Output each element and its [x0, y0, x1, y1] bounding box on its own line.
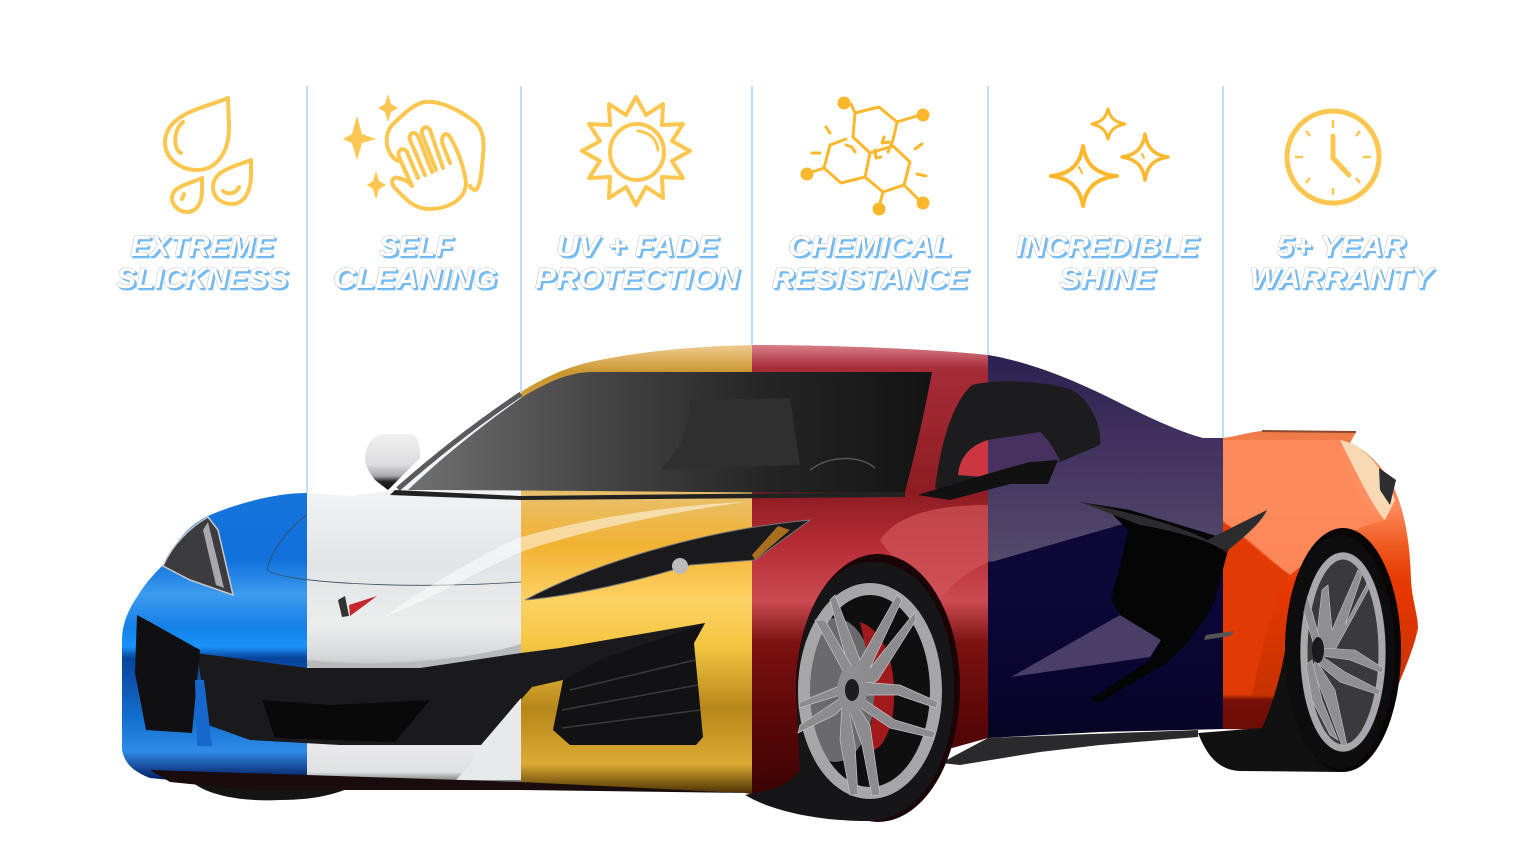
- orange rear highlight: [1340, 440, 1395, 520]
- label: self cleaning: SELF: [379, 231, 454, 263]
- front brake disc and caliper: [795, 618, 894, 762]
- rear rim ring: [1304, 556, 1382, 748]
- purple lower highlight: [1011, 615, 1161, 677]
- front tyre shadow under bumper: [185, 775, 365, 800]
- amber headlight accent: [752, 526, 790, 560]
- icon: molecule: [800, 96, 930, 216]
- orange lower panel: [1223, 522, 1290, 695]
- label: five year warranty: WARRANTY: [1250, 263, 1435, 295]
- colored body bands: [100, 340, 1433, 820]
- panel: five year warranty: [1250, 111, 1435, 295]
- windshield: [408, 372, 932, 493]
- wiper strip: [390, 490, 905, 500]
- lower center grille mesh: [262, 700, 430, 742]
- front emblem: [338, 596, 377, 617]
- label: uv and fade protection: UV + FADE: [556, 231, 720, 263]
- rear light: [1379, 468, 1396, 505]
- front rim ring: [804, 589, 936, 793]
- right headlight: [525, 520, 810, 600]
- side skirt: [941, 730, 1198, 765]
- front tyre: [745, 562, 954, 821]
- red door highlight: [880, 505, 988, 596]
- label: incredible shine: INCREDIBLE: [1016, 231, 1200, 263]
- label: incredible shine: SHINE: [1059, 263, 1157, 295]
- panel: chemical resistance: [772, 96, 970, 295]
- divider lines between benefits: [307, 86, 1223, 494]
- front spokes: [798, 595, 938, 796]
- label: five year warranty: 5+ YEAR: [1276, 231, 1406, 263]
- side intake trim: [1080, 502, 1267, 552]
- label: self cleaning: CLEANING: [333, 263, 497, 295]
- white bumper splitter: [456, 698, 521, 780]
- rear rim: [1300, 552, 1386, 752]
- right intake: [553, 623, 705, 745]
- side mirror: [918, 432, 1060, 500]
- icon: clock: [1287, 111, 1379, 203]
- yellow hood streak: [384, 502, 745, 617]
- label: extreme slickness: SLICKNESS: [116, 263, 289, 295]
- steering wheel: [810, 458, 875, 470]
- panel: extreme slickness: [116, 98, 289, 295]
- front lip shadow: [150, 770, 745, 793]
- left intake divider: [195, 680, 212, 746]
- side window: [935, 381, 1100, 495]
- white hood shine: [307, 644, 521, 670]
- headlight orb: [672, 558, 688, 574]
- icon: hand wiping with sparkles: [343, 94, 484, 209]
- left intake: [135, 615, 200, 733]
- label: uv and fade protection: PROTECTION: [535, 263, 740, 295]
- label: extreme slickness: EXTREME: [130, 231, 276, 263]
- wheel arch: [796, 554, 960, 822]
- front rim: [798, 582, 942, 800]
- car illustration: [100, 340, 1433, 822]
- interior seat: [660, 398, 800, 470]
- rear hub: [1312, 637, 1324, 663]
- side air intake: [1080, 502, 1267, 703]
- panel: incredible shine: [1016, 109, 1200, 295]
- hood crease line: [267, 515, 521, 585]
- icon: sparkles: [1051, 109, 1168, 206]
- label: chemical resistance: RESISTANCE: [772, 263, 970, 295]
- left headlight: [163, 517, 233, 595]
- panel: uv and fade protection: [535, 97, 740, 295]
- intake mesh: [562, 660, 700, 728]
- front wheel: [745, 554, 960, 822]
- icon: water drops: [165, 98, 251, 212]
- front center cap: [845, 679, 859, 701]
- front hub: [837, 666, 867, 714]
- icon: sun: [582, 97, 690, 205]
- rear tyre ring: [1285, 535, 1395, 769]
- front center grille: [196, 623, 705, 745]
- rear arch: [1285, 528, 1401, 772]
- side badge: [1204, 631, 1234, 640]
- orange fender glow: [1223, 440, 1385, 575]
- rear tread: [1198, 620, 1340, 772]
- purple dark slant: [992, 524, 1128, 562]
- A pillar: [398, 394, 521, 489]
- mirror front white: [365, 434, 420, 490]
- rear wheel: [1198, 528, 1401, 772]
- rear spokes: [1303, 570, 1383, 746]
- panel: self cleaning: [333, 94, 497, 295]
- label: chemical resistance: CHEMICAL: [788, 231, 952, 263]
- spoiler line: [1262, 431, 1356, 432]
